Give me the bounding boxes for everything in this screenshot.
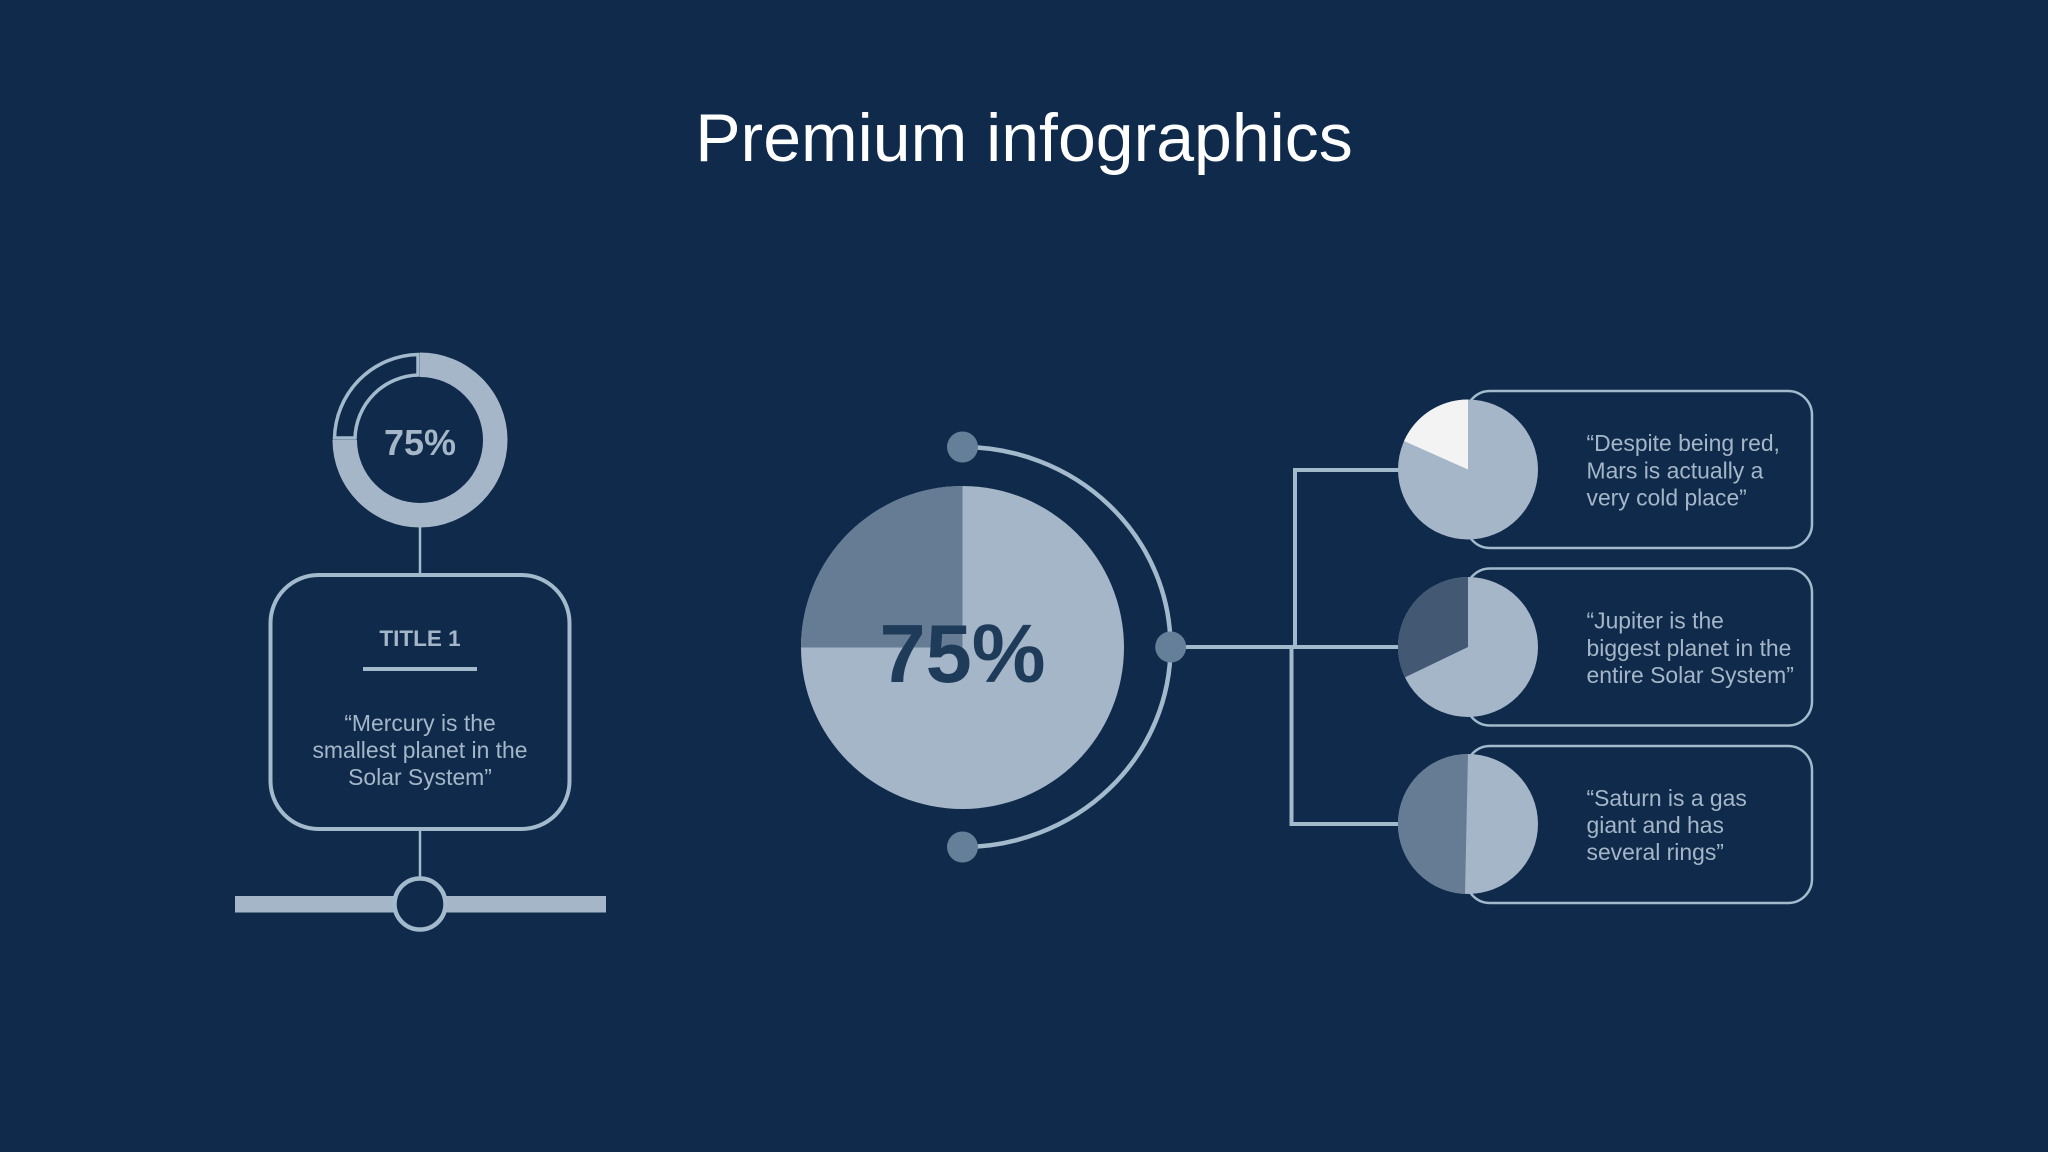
dot: arc top <box>947 432 978 462</box>
connector: donut to card <box>419 527 421 575</box>
quote: Jupiter: biggest planet in the <box>1586 635 1791 661</box>
dot: arc middle <box>1155 632 1186 662</box>
card heading: TITLE 1 <box>379 626 461 651</box>
card text: “Mercury is the <box>344 710 496 736</box>
donut chart: 75% <box>332 352 507 528</box>
connector tree <box>1186 470 1400 824</box>
slider <box>235 878 606 930</box>
pie chart: Jupiter <box>1398 577 1538 717</box>
panel: Jupiter <box>1398 568 1812 726</box>
card text: Solar System” <box>348 764 492 790</box>
panel: Mars <box>1398 391 1812 548</box>
dot: arc bottom <box>947 832 978 862</box>
panel: Saturn <box>1398 746 1812 903</box>
quote: Mars: very cold place” <box>1586 484 1747 510</box>
heading underline <box>363 667 477 671</box>
semicircular arc <box>962 447 1171 847</box>
quote: Saturn: several rings” <box>1586 839 1724 865</box>
card outline <box>1466 568 1812 726</box>
pie chart: 75% <box>801 486 1124 809</box>
quote: Mars: “Despite being red, <box>1586 430 1780 456</box>
title: Premium infographics <box>695 100 1353 176</box>
quote: Saturn: “Saturn is a gas <box>1586 785 1747 811</box>
quote: Mars: Mars is actually a <box>1586 458 1764 484</box>
pie chart: Mars <box>1398 399 1538 540</box>
card: Mercury <box>270 575 570 829</box>
pie chart: Saturn <box>1398 754 1538 894</box>
pie chart: 75%: 75% <box>879 607 1046 700</box>
panel: left column <box>235 352 606 930</box>
quote: Jupiter: “Jupiter is the <box>1586 608 1724 634</box>
quote: Saturn: giant and has <box>1586 812 1724 838</box>
donut chart: 75%: 75% <box>384 422 456 463</box>
panel: central chart <box>801 432 1186 862</box>
connector: card to slider <box>419 830 421 878</box>
card outline <box>1466 746 1812 903</box>
quote: Jupiter: entire Solar System” <box>1586 662 1794 688</box>
card outline <box>1466 391 1812 548</box>
card text: smallest planet in the <box>312 737 528 763</box>
